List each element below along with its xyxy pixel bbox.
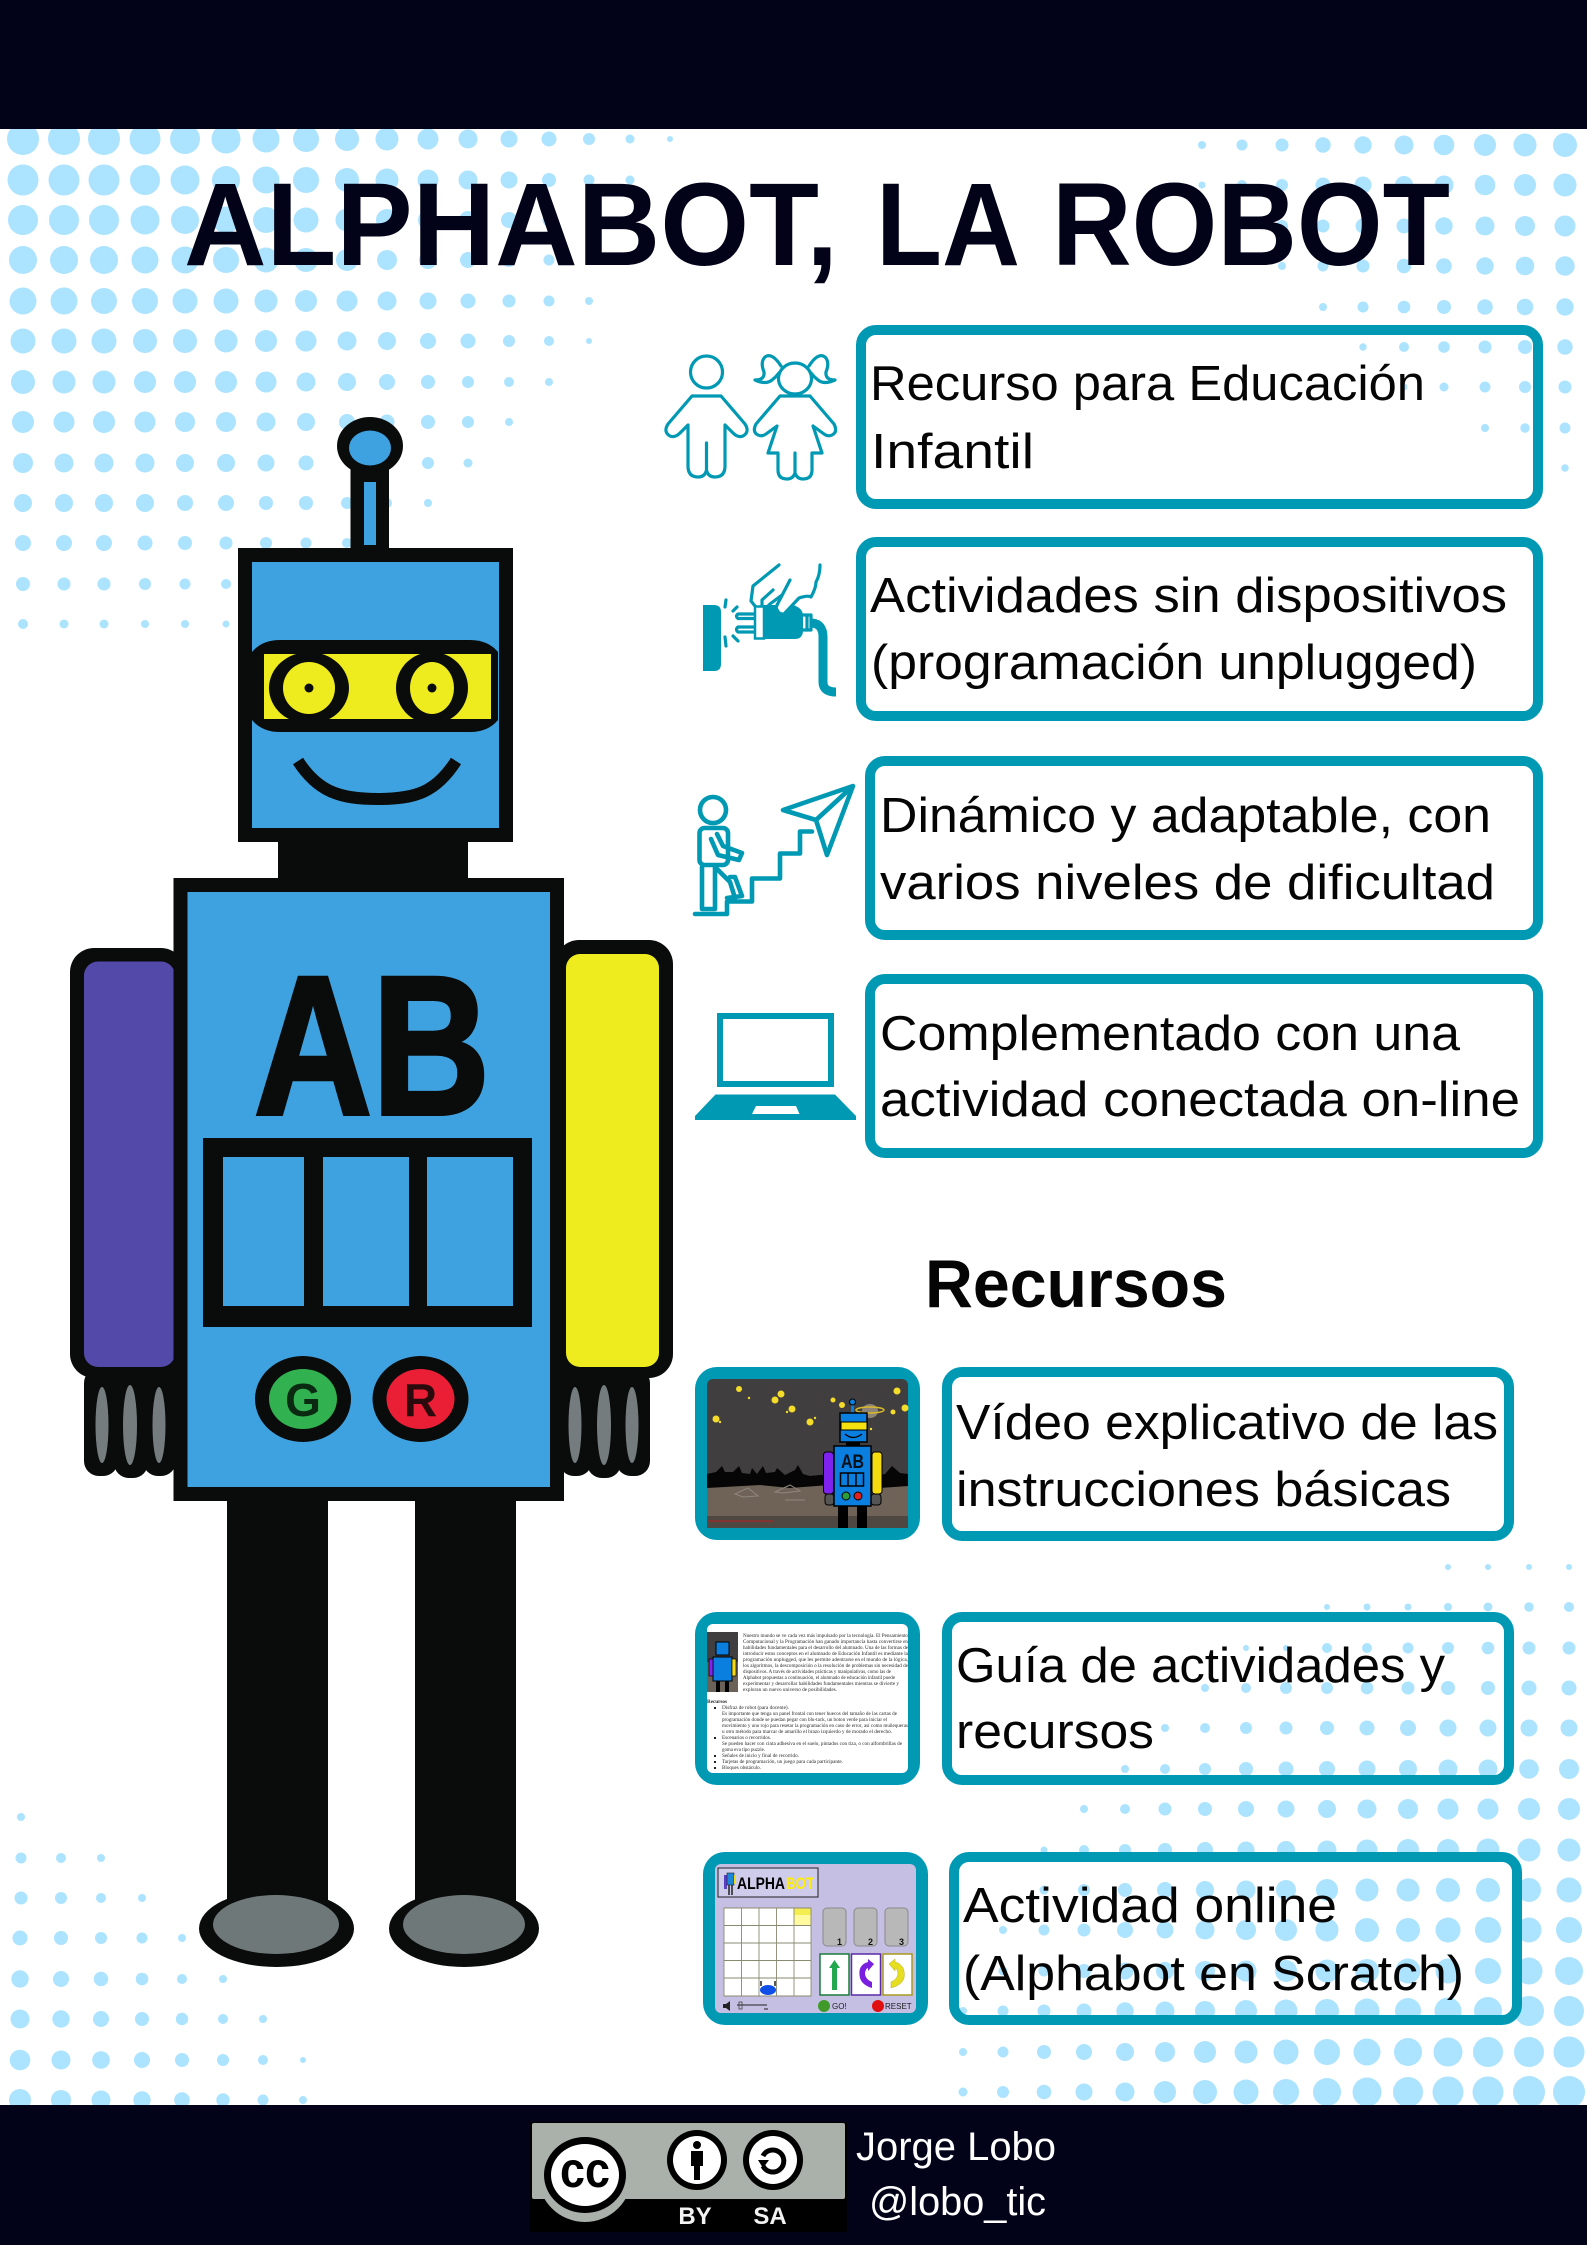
planet: [856, 1404, 884, 1418]
title: ALPHABOT,: [184, 159, 838, 291]
box: Actividades sin dispositivos: (programación unplugged): [871, 636, 1477, 690]
program card slots: 3: [899, 1937, 904, 1947]
GO button: GO!: [832, 2002, 847, 2011]
Scratch logo: [718, 1868, 818, 1897]
robot left hand: [84, 1368, 176, 1478]
program card slots: 1: [837, 1937, 842, 1947]
guide text: Nuestro mundo se ve cada vez más impulsado por la tecnología. El Pensamiento: [743, 1633, 908, 1639]
guide text: habilidades fundamentales para el desarrollo del alumnado. Una de las formas de: [743, 1644, 908, 1651]
box: Dinámico y adaptable: [870, 761, 1538, 935]
robot body: [180, 885, 557, 1494]
title: LA: [876, 159, 1020, 291]
small robot in video: AB: [841, 1452, 864, 1473]
robot neck: [278, 836, 468, 886]
guide text: Bloques obstáculo.: [722, 1765, 762, 1771]
guide text: Disfraz de robot (para docente).: [722, 1704, 790, 1711]
icon: unplugged plug: [703, 565, 836, 692]
box: Complementado con una actividad: Complementado con una: [880, 1007, 1461, 1061]
box: Dinámico y adaptable: varios niveles de dificultad: [880, 856, 1495, 910]
box: Vídeo explicativo: [947, 1372, 1509, 1536]
icon: person climbing stairs with paper plane: [695, 786, 853, 914]
robot right hand: [559, 1368, 650, 1478]
share-alike symbol: [743, 2130, 803, 2190]
box: Guía de actividades: Guía de actividades y: [956, 1639, 1446, 1693]
box: Recurso para Educación Infantil: [861, 330, 1538, 504]
guide text: Se pueden hacer con cinta adhesiva en el suelo, pintados con tiza, o con alfombrillas de: [722, 1740, 902, 1747]
robot feet: [199, 1890, 539, 1967]
guide text: movimiento y uno rojo para resetar la programación en caso de error, así como muñequeras: [722, 1723, 908, 1729]
Scratch logo: BOT: [786, 1874, 814, 1893]
guide text: dispositivos. A través de actividades prácticas y manipulativas, como las de: [743, 1669, 891, 1675]
Scratch logo: ALPHA: [737, 1874, 785, 1893]
guide text: experimentar y desarrollar habilidades fundamentales mientras se divierte y: [743, 1680, 899, 1687]
robot illustration: [70, 417, 673, 1967]
box: Vídeo explicativo: instrucciones básicas: [956, 1463, 1451, 1517]
box: Actividad online: (Alphabot en Scratch): [963, 1947, 1464, 2001]
box: Recurso para Educación Infantil: Infantil: [871, 425, 1034, 479]
box: Guía de actividades: recursos: [956, 1705, 1154, 1759]
robot antenna: [337, 417, 403, 555]
green button G: G: [285, 1374, 321, 1426]
guide text: los algoritmos, la descomposición o la resolución de problemas sin necesidad de: [743, 1663, 908, 1669]
cc symbol: [538, 2128, 632, 2222]
guide text: [707, 1633, 909, 1771]
top band: [0, 0, 1587, 129]
author name: Jorge Lobo: [856, 2125, 1056, 2169]
red button R: [372, 1356, 468, 1442]
box: Complementado con una actividad: [870, 979, 1538, 1153]
title: [184, 159, 1450, 291]
box: Recurso para Educación Infantil: Recurso para Educación: [870, 357, 1425, 411]
body lettering AB: AB: [254, 935, 490, 1156]
robot right arm: [555, 940, 673, 1378]
guide robot picture: [707, 1632, 738, 1692]
guide text: Alphabot propuestas a continuación, el alumnado de educación infantil puede: [743, 1674, 895, 1681]
program card slots: 2: [868, 1937, 873, 1947]
guide text: Computacional y la Programación han ganado importancia hasta convertirse en: [743, 1639, 908, 1645]
guide text: exploran un nuevo universo de posibilidades.: [743, 1687, 838, 1693]
box: Actividades sin dispositivos: Actividades sin dispositivos: [870, 569, 1507, 623]
box: Vídeo explicativo: Vídeo explicativo de las: [956, 1396, 1498, 1450]
green button G: [255, 1356, 351, 1442]
guide text: goma eva tipo puzzle.: [722, 1747, 766, 1753]
program card slots: [823, 1908, 908, 1947]
SA label: SA: [753, 2203, 787, 2230]
box: Dinámico y adaptable: Dinámico y adaptable, con: [880, 789, 1491, 843]
author handle: @lobo_tic: [869, 2180, 1046, 2224]
volume control: [723, 2001, 768, 2011]
icon: laptop: [695, 1016, 856, 1120]
RESET button: [872, 2000, 912, 2012]
guide text: Es importante que tenga un panel frontal con tener huecos del tamaño de las cartas de: [722, 1710, 897, 1717]
body panel with three slots: [203, 1138, 532, 1327]
cc symbol: cc: [560, 2142, 610, 2198]
box: Guía de actividades: [947, 1617, 1509, 1780]
guide text: Recursos: [707, 1699, 728, 1705]
Scratch grid: [724, 1908, 811, 1996]
arrow cards: [820, 1954, 912, 1995]
guide text: Tarjetas de programación, un juego para cada participante.: [722, 1759, 844, 1765]
red button R: R: [404, 1374, 437, 1426]
box: Actividades sin dispositivos: [861, 542, 1538, 716]
guide text: Señales de inicio y final de recorrido.: [722, 1752, 800, 1759]
guide text: u otro método para marcar de amarillo el brazo izquierdo y de morado el derecho.: [722, 1729, 893, 1735]
heading: Recursos: Recursos: [925, 1246, 1227, 1322]
title: ROBOT: [1052, 159, 1450, 291]
attribution symbol: [667, 2130, 727, 2190]
RESET button: RESET: [885, 2002, 912, 2011]
GO button: [818, 2000, 847, 2012]
robot legs: [227, 1495, 516, 1905]
creative commons badge: [530, 2122, 847, 2232]
thumbnail: Scratch activity: [703, 1852, 928, 2025]
guide text: programación donde se puedan pegar con blu-tack, un boton verde para iniciar el: [722, 1717, 887, 1723]
icon: children: [666, 356, 836, 479]
guide text: Escenarios o recorridos.: [722, 1735, 772, 1741]
BY label: BY: [678, 2203, 712, 2230]
thumbnail: activity guide page: [695, 1612, 920, 1785]
guide text: introducir estos conceptos en el alumnado de Educación Infantil es mediante la: [743, 1650, 908, 1657]
thumbnail: video frame: [695, 1367, 920, 1540]
box: Actividad online: Actividad online: [963, 1879, 1337, 1933]
small robot in video: [824, 1399, 882, 1528]
robot left arm: [70, 948, 185, 1378]
footer band: [0, 2105, 1587, 2245]
night stars: [712, 1386, 908, 1430]
box: Complementado con una actividad: actividad conectada on-line: [880, 1073, 1520, 1127]
guide text: programación unplugged, que les permite adentrarse en el mundo de la lógica,: [743, 1657, 909, 1663]
robot head: [245, 555, 506, 835]
box: Actividad online: [954, 1857, 1517, 2020]
